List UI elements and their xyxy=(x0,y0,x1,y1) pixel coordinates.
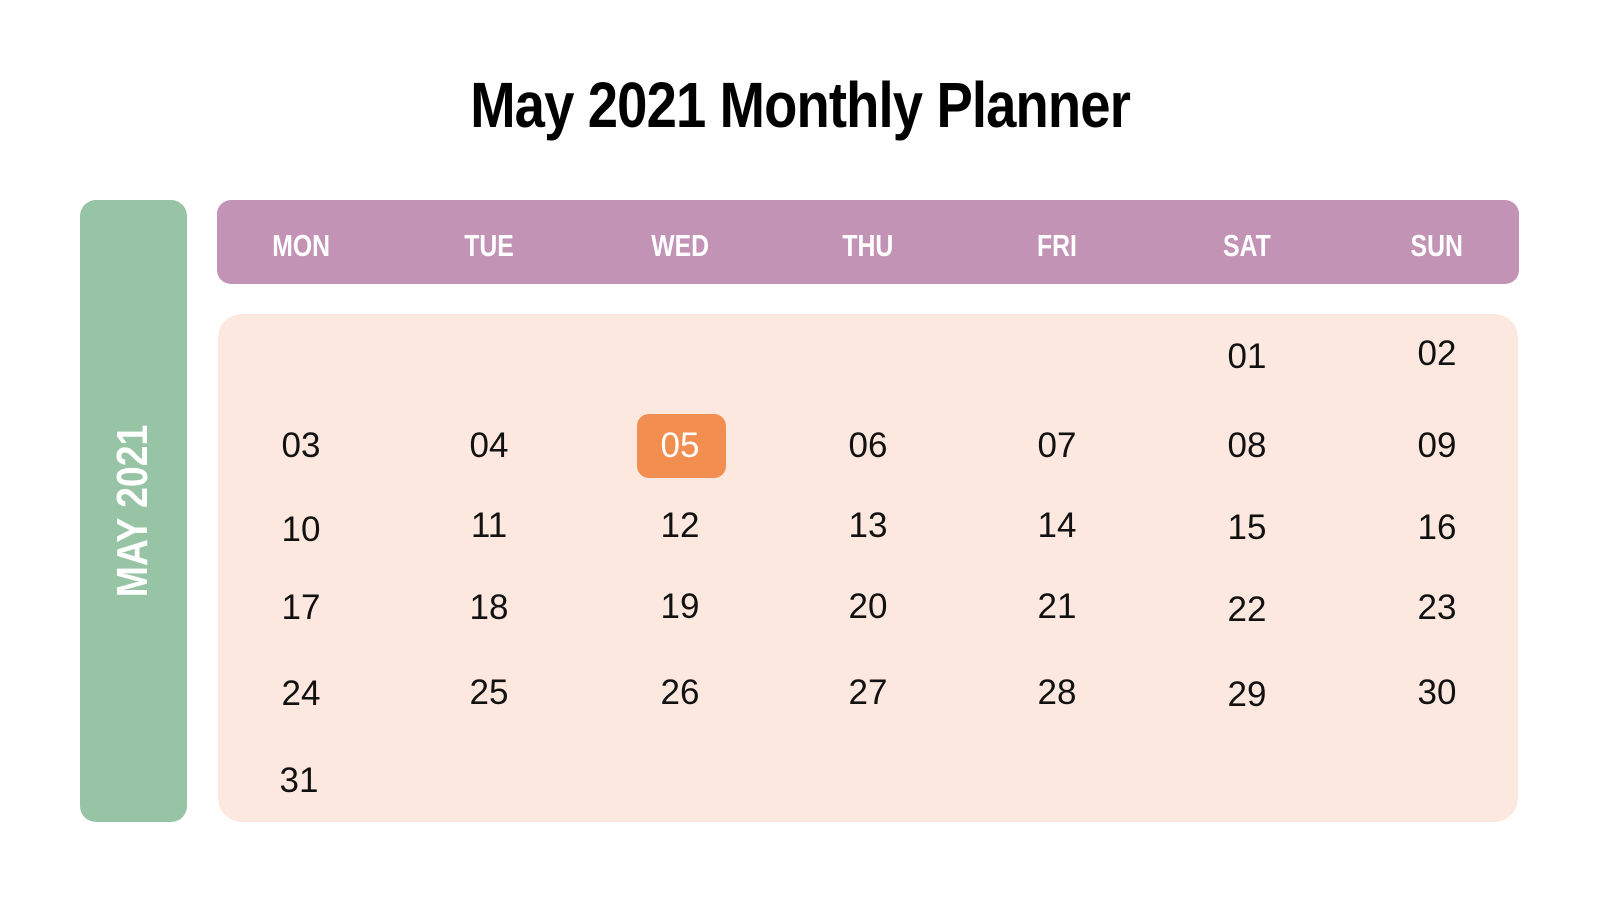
day numbers: 21 xyxy=(1038,587,1076,626)
day numbers: 07 xyxy=(1038,426,1076,465)
day numbers: 29 xyxy=(1228,675,1266,714)
day numbers: 16 xyxy=(1418,508,1456,547)
weekday labels: SUN xyxy=(1411,228,1463,263)
day numbers: 19 xyxy=(661,587,699,626)
highlight: day 05 xyxy=(637,414,726,478)
day numbers: 08 xyxy=(1228,426,1266,465)
weekday header bar xyxy=(217,200,1519,284)
calendar grid panel xyxy=(218,314,1518,822)
day numbers: 23 xyxy=(1418,588,1456,627)
day numbers: 28 xyxy=(1038,673,1076,712)
weekday labels: TUE xyxy=(464,228,514,263)
day numbers: 09 xyxy=(1418,426,1456,465)
weekday labels: WED xyxy=(651,228,709,263)
vertical month text: MAY 2021 xyxy=(108,425,157,597)
day numbers: 27 xyxy=(849,673,887,712)
day numbers: 14 xyxy=(1038,506,1076,545)
day numbers: 24 xyxy=(282,674,320,713)
day numbers: 25 xyxy=(470,673,508,712)
day numbers: 03 xyxy=(282,426,320,465)
day numbers: 31 xyxy=(280,761,318,800)
day numbers: 26 xyxy=(661,673,699,712)
day numbers: 12 xyxy=(661,506,699,545)
weekday labels xyxy=(272,228,1463,263)
day numbers: 01 xyxy=(1228,337,1266,376)
day numbers: 11 xyxy=(471,506,507,545)
day numbers: 02 xyxy=(1418,334,1456,373)
day numbers: 17 xyxy=(282,588,320,627)
day numbers: 06 xyxy=(849,426,887,465)
day numbers: 30 xyxy=(1418,673,1456,712)
weekday labels: SAT xyxy=(1223,228,1271,263)
side bar: month label xyxy=(80,200,187,822)
day numbers: 10 xyxy=(282,510,320,549)
day numbers: 04 xyxy=(470,426,508,465)
weekday labels: FRI xyxy=(1037,228,1077,263)
day numbers: 22 xyxy=(1228,590,1266,629)
title: May 2021 Monthly Planner xyxy=(470,69,1130,141)
day numbers: 05 xyxy=(661,426,699,465)
weekday labels: THU xyxy=(843,228,893,263)
weekday labels: MON xyxy=(272,228,330,263)
day numbers: 15 xyxy=(1228,508,1266,547)
day numbers: 20 xyxy=(849,587,887,626)
day numbers: 18 xyxy=(470,588,508,627)
day numbers: 13 xyxy=(849,506,887,545)
